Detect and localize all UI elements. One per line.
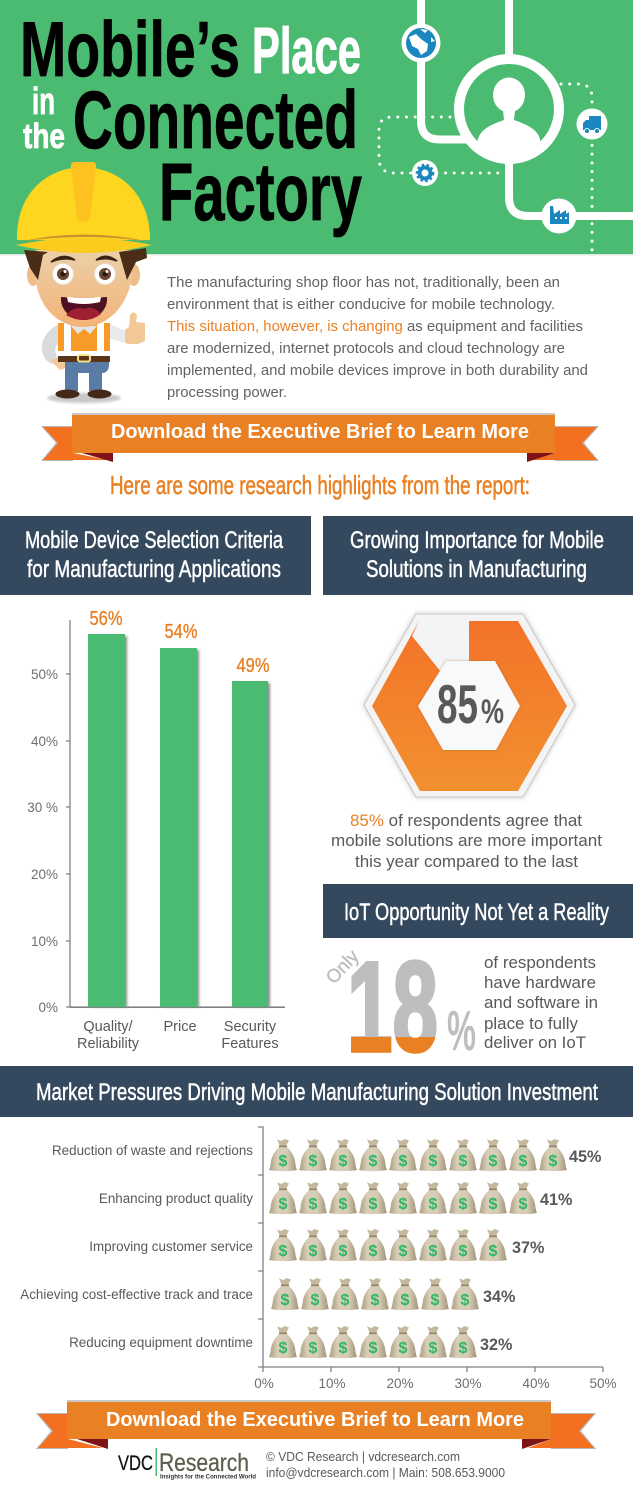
hexagon gauge: 85%: %	[481, 693, 504, 731]
pictogram chart: market pressures: 0%	[254, 1376, 274, 1391]
intro paragraph: implemented, and mobile devices improve in both durability and	[167, 363, 588, 379]
right arm	[108, 323, 127, 343]
logo: VDC Research	[118, 1448, 256, 1480]
hexagon gauge: 85%	[364, 614, 575, 797]
row: 34 percent: $	[281, 1292, 290, 1309]
caption: 85 percent: 85% of respondents agree that	[350, 811, 582, 830]
row: 45 percent: $	[399, 1153, 408, 1170]
row: 41 percent: $	[369, 1196, 378, 1213]
row: 37 percent: $	[279, 1243, 288, 1260]
stat: only 18 percent: Only	[322, 946, 364, 988]
bar: security	[232, 655, 270, 1007]
row: 37 percent: $	[309, 1243, 318, 1260]
row: 37 percent	[269, 1229, 544, 1261]
ribbon: download top: Download the Executive Brief to Learn More	[111, 421, 529, 443]
row: 32 percent: $	[369, 1340, 378, 1357]
stat: only 18 percent	[322, 936, 598, 1079]
icon: person	[459, 59, 559, 170]
contact details: info@vdcresearch.com | Main: 508.653.9000	[266, 1466, 505, 1480]
ribbon: download bottom: Download the Executive Brief to Learn More	[106, 1409, 524, 1431]
row: 34 percent: $	[341, 1292, 350, 1309]
bar chart: selection criteria: Security	[224, 1019, 277, 1035]
legs	[65, 361, 109, 391]
bar: price	[160, 621, 199, 1007]
row: 45 percent: $	[279, 1153, 288, 1170]
pictogram chart: market pressures: 40%	[522, 1376, 550, 1391]
row: 37 percent: $	[369, 1243, 378, 1260]
row: 45 percent: $	[429, 1153, 438, 1170]
ribbon: download bottom	[36, 1400, 596, 1449]
row: 34 percent: 34%	[483, 1288, 515, 1306]
icon: factory	[542, 198, 576, 234]
row: 37 percent: $	[489, 1243, 498, 1260]
pictogram chart: market pressures: 50%	[589, 1376, 617, 1391]
contact details: © VDC Research | vdcresearch.com	[266, 1450, 460, 1464]
panel heading: market pressures	[0, 1066, 633, 1117]
bar chart: selection criteria: 20%	[31, 867, 58, 882]
caption: 85 percent: mobile solutions are more important	[331, 831, 602, 850]
stat: only 18 percent: 18	[347, 936, 438, 1079]
title	[20, 5, 362, 238]
network diagram	[379, 0, 633, 254]
bar chart: selection criteria	[27, 608, 285, 1052]
row: 34 percent: $	[461, 1292, 470, 1309]
row: 32 percent: $	[279, 1340, 288, 1357]
row: 45 percent: 45%	[569, 1148, 601, 1166]
bar: quality: 56%	[90, 608, 123, 630]
bar: price: 54%	[164, 621, 198, 643]
stat: only 18 percent: deliver on IoT	[484, 1034, 586, 1052]
row: 41 percent: $	[519, 1196, 528, 1213]
row: 45 percent: $	[549, 1153, 558, 1170]
panel heading: selection criteria: Mobile Device Selection Criteria	[25, 527, 283, 554]
row: 37 percent: $	[459, 1243, 468, 1260]
row: 41 percent: $	[429, 1196, 438, 1213]
row: 32 percent: $	[429, 1340, 438, 1357]
row: 41 percent: $	[339, 1196, 348, 1213]
bar chart: selection criteria: 30 %	[27, 800, 58, 815]
pictogram chart: market pressures: Achieving cost-effective track and trace	[20, 1287, 253, 1302]
row: 41 percent: $	[279, 1196, 288, 1213]
row: 45 percent: $	[339, 1153, 348, 1170]
bar chart: selection criteria: Reliability	[77, 1036, 140, 1052]
ribbon: download top	[41, 413, 599, 462]
row: 37 percent: $	[429, 1243, 438, 1260]
pictogram chart: market pressures: 10%	[318, 1376, 346, 1391]
row: 32 percent: 32%	[480, 1336, 512, 1354]
mouth	[61, 297, 107, 320]
pictogram chart: market pressures	[20, 1127, 617, 1391]
row: 34 percent: $	[311, 1292, 320, 1309]
logo: VDC Research: VDC	[118, 1452, 153, 1475]
title: Place	[252, 14, 361, 87]
pictogram chart: market pressures: 30%	[454, 1376, 482, 1391]
eyes	[51, 256, 117, 262]
row: 37 percent: 37%	[512, 1239, 544, 1257]
bar chart: selection criteria: 10%	[31, 934, 58, 949]
hard hat	[17, 167, 150, 240]
row: 41 percent: $	[309, 1196, 318, 1213]
pictogram chart: market pressures: Enhancing product quality	[99, 1191, 253, 1206]
bar chart: selection criteria: 40%	[31, 734, 58, 749]
row: 37 percent: $	[399, 1243, 408, 1260]
header band	[0, 0, 633, 256]
row: 37 percent: $	[339, 1243, 348, 1260]
worker mascot	[16, 162, 152, 403]
row: 32 percent	[269, 1326, 512, 1358]
row: 34 percent: $	[371, 1292, 380, 1309]
pictogram chart: market pressures: 20%	[386, 1376, 414, 1391]
panel heading: selection criteria: for Manufacturing Applications	[27, 556, 281, 583]
panel heading: growing importance	[323, 516, 633, 595]
panel heading: selection criteria	[0, 516, 311, 595]
icon: globe	[402, 24, 440, 62]
left arm	[42, 324, 60, 364]
row: 34 percent: $	[401, 1292, 410, 1309]
row: 32 percent: $	[339, 1340, 348, 1357]
title: in	[32, 81, 55, 123]
stat: only 18 percent: of respondents	[484, 954, 596, 972]
vest	[58, 323, 110, 356]
logo: VDC Research: Insights for the Connected World	[160, 1474, 256, 1480]
bar chart: selection criteria: Quality/	[83, 1019, 134, 1035]
pictogram chart: market pressures: Reducing equipment downtime	[69, 1335, 253, 1350]
title: Mobile’s	[20, 5, 240, 93]
stat: only 18 percent: place to fully	[484, 1015, 579, 1033]
row: 45 percent: $	[369, 1153, 378, 1170]
row: 34 percent	[271, 1278, 515, 1310]
row: 45 percent: $	[459, 1153, 468, 1170]
row: 41 percent: $	[399, 1196, 408, 1213]
bar: quality	[88, 608, 127, 1007]
intro paragraph	[167, 275, 588, 401]
head	[27, 264, 39, 286]
caption: 85 percent	[331, 811, 602, 871]
bar chart: selection criteria: 50%	[31, 667, 58, 682]
row: 45 percent: $	[519, 1153, 528, 1170]
row: 45 percent: $	[489, 1153, 498, 1170]
row: 41 percent	[269, 1182, 572, 1214]
bar chart: selection criteria: 0%	[38, 1000, 58, 1015]
row: 34 percent: $	[431, 1292, 440, 1309]
caption: 85 percent: this year compared to the last	[355, 852, 578, 871]
pictogram chart: market pressures: Reduction of waste and rejections	[52, 1143, 253, 1158]
row: 45 percent: $	[309, 1153, 318, 1170]
stat: only 18 percent: have hardware	[484, 974, 596, 992]
panel heading: IoT opportunity	[323, 884, 633, 938]
contact details	[266, 1450, 505, 1480]
row: 32 percent: $	[399, 1340, 408, 1357]
icon: truck	[576, 108, 608, 140]
stat: only 18 percent: and software in	[484, 994, 598, 1012]
intro paragraph: environment that is either conducive for mobile technology.	[167, 297, 555, 313]
row: 32 percent: $	[459, 1340, 468, 1357]
intro paragraph: are modernized, internet protocols and cloud technology are	[167, 341, 565, 357]
hexagon gauge: 85%: 85	[437, 673, 478, 735]
bar chart: selection criteria: Price	[163, 1019, 197, 1035]
row: 45 percent	[269, 1139, 601, 1171]
row: 41 percent: 41%	[540, 1191, 572, 1209]
bar chart: selection criteria: Features	[221, 1036, 279, 1052]
bar: security: 49%	[236, 655, 270, 677]
icon: gear	[412, 160, 438, 186]
title: the	[23, 117, 65, 156]
stat: only 18 percent: %	[447, 999, 476, 1063]
title: Factory	[159, 147, 362, 238]
row: 41 percent: $	[459, 1196, 468, 1213]
intro paragraph: processing power.	[167, 385, 287, 401]
row: 32 percent: $	[309, 1340, 318, 1357]
pictogram chart: market pressures: Improving customer service	[89, 1239, 253, 1254]
intro paragraph: This situation, however, is changing as equipment and facilities	[167, 319, 583, 335]
logo: VDC Research: Research	[159, 1449, 249, 1477]
row: 41 percent: $	[489, 1196, 498, 1213]
intro paragraph: The manufacturing shop floor has not, traditionally, been an	[167, 275, 560, 291]
title: Connected	[73, 75, 358, 166]
